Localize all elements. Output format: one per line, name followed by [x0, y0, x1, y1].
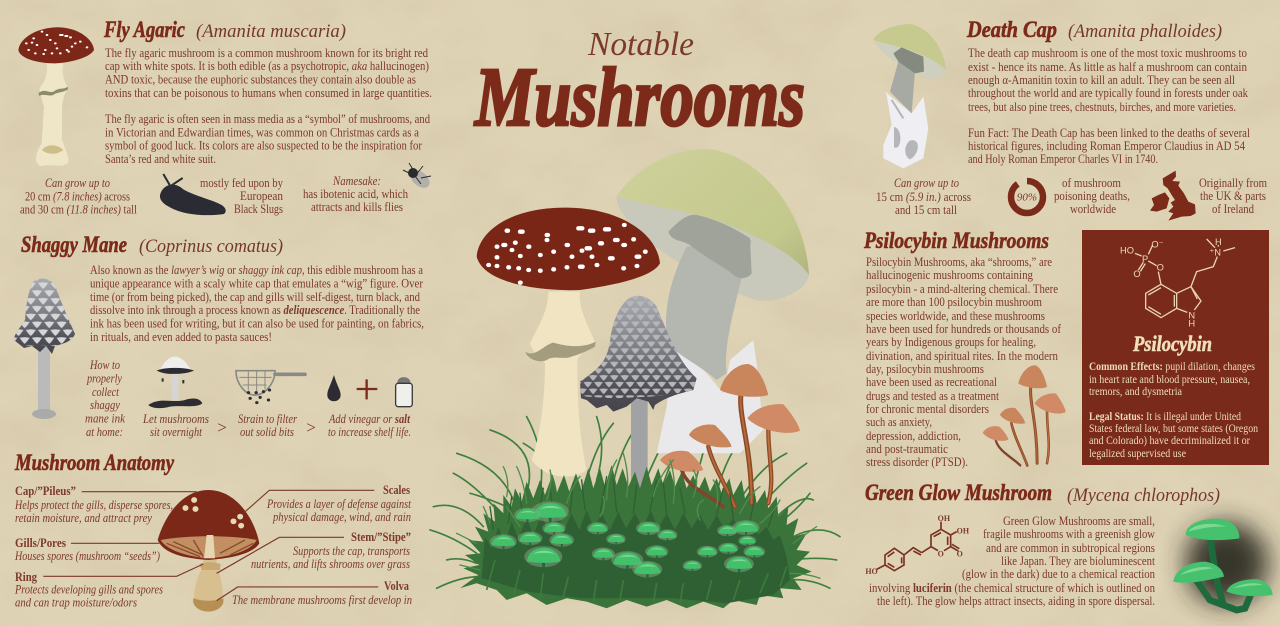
- heading: Psilocybin Mushrooms: [863, 228, 1049, 253]
- description: for chronic mental disorders: [866, 402, 989, 416]
- slug caption: European: [240, 189, 284, 203]
- panel: death cap: [873, 17, 1267, 221]
- label: gills: Gills/Pores: [15, 536, 66, 550]
- origin caption: the UK & parts: [1200, 189, 1266, 203]
- description: hallucinogenic mushrooms containing: [866, 268, 1034, 282]
- how to caption: [85, 358, 125, 439]
- heading: Green Glow Mushroom: [865, 480, 1052, 505]
- how to caption: at home:: [86, 425, 123, 439]
- fly agaric mushroom: [477, 208, 660, 477]
- description: [90, 263, 424, 344]
- title: Mushrooms: [473, 51, 805, 144]
- death cap mushroom: [617, 149, 809, 453]
- description: AND toxic, because the euphoric substances they contain also double as: [105, 72, 416, 86]
- size caption: [876, 176, 971, 217]
- icon: UK and Ireland map: [1150, 171, 1196, 221]
- icon: shaggy mane mushroom: [14, 278, 75, 419]
- size caption: and 15 cm tall: [895, 203, 957, 217]
- size caption: Can grow up to: [45, 176, 110, 190]
- front grass: [457, 453, 820, 603]
- chemical structure: psilocybin: H: [1188, 319, 1195, 329]
- legal status: legalized supervised use: [1089, 446, 1186, 460]
- common effects: in heart rate and blood pressure, nausea,: [1089, 372, 1250, 386]
- description: The death cap mushroom is one of the most toxic mushrooms to: [968, 46, 1247, 60]
- icon: fly: [403, 163, 433, 191]
- description: years by Indigenous groups for healing,: [866, 335, 1036, 349]
- label: cap: retain moisture, and attract prey: [15, 511, 152, 525]
- origin caption: [1199, 176, 1267, 216]
- heading: Mushroom Anatomy: [14, 450, 175, 475]
- common effects: Common Effects: pupil dilation, changes: [1089, 359, 1255, 373]
- label: ring: [14, 570, 163, 610]
- grass mid layer: [460, 465, 812, 608]
- icon: ink mushroom step: [148, 357, 202, 408]
- icon: strainer: [236, 371, 305, 403]
- label: ring: Ring: [15, 570, 38, 584]
- step caption: vinegar or salt: [328, 412, 411, 439]
- step caption: vinegar or salt: Add vinegar or salt: [328, 412, 410, 426]
- how to caption: mane ink: [85, 412, 125, 426]
- glowing green mushrooms: [490, 501, 765, 578]
- label: scales: Provides a layer of defense against: [266, 497, 411, 511]
- description: have been used as recreational: [866, 375, 997, 389]
- description: depression, addiction,: [866, 429, 961, 443]
- poisoning caption: of mushroom: [1062, 176, 1121, 190]
- label: cap: [14, 484, 173, 525]
- description: [869, 514, 1156, 608]
- panel: psilocybin mushrooms: [863, 228, 1269, 469]
- origin caption: Originally from: [1199, 176, 1267, 190]
- slug caption: Black Slugs: [234, 202, 283, 216]
- poisoning caption: worldwide: [1070, 202, 1116, 216]
- description: and are common in subtropical regions: [986, 541, 1155, 555]
- description: trees, but also pine trees, chestnuts, birches, and more varieties.: [968, 100, 1236, 114]
- size caption: 15 cm (5.9 in.) across: [876, 190, 971, 204]
- chemical structure: luciferin: OH: [957, 526, 970, 535]
- legal status: Legal Status: It is illegal under United: [1089, 409, 1241, 423]
- label: gills: [14, 536, 160, 563]
- step caption: vinegar or salt: to increase shelf life.: [328, 425, 411, 439]
- label: stem: [251, 530, 411, 571]
- description: Psilocybin Mushrooms, aka “shrooms,” are: [866, 255, 1052, 269]
- legal status: and Colorado) have decriminalized it or: [1089, 433, 1250, 447]
- namesake caption: has ibotenic acid, which: [303, 187, 409, 201]
- how to caption: collect: [92, 385, 119, 399]
- label: cap: Helps protect the gills, disperse spores,: [14, 498, 173, 512]
- label: stem: Stem/”Stipe”: [351, 530, 411, 544]
- donut chart: 90%: 90%: [1017, 192, 1037, 204]
- latin name: (Amanita muscaria): [196, 21, 346, 42]
- chemical structure: psilocybin: [1120, 237, 1235, 329]
- description: involving luciferin (the chemical structure of which is outlined on: [869, 581, 1156, 595]
- heading: Death Cap: [966, 17, 1057, 42]
- anatomy mushroom diagram: [43, 490, 378, 612]
- heading: Fly Agaric: [103, 17, 185, 42]
- label: ring: Protects developing gills and spores: [14, 582, 163, 596]
- chemical structure: luciferin: OH: [938, 514, 951, 523]
- label: ring: and can trap moisture/odors: [15, 596, 137, 610]
- label: scales: Scales: [383, 483, 410, 497]
- chemical structure: psilocybin: O: [1157, 262, 1164, 272]
- description: time (or from being picked), the cap and gills will self-digest, turn black, and: [90, 290, 421, 304]
- description: drugs and tested as a treatment: [866, 389, 999, 403]
- central illustration: mushrooms in grass: [430, 149, 840, 608]
- description: dissolve into ink through a process known as deliquescence. Traditionally the: [90, 303, 420, 317]
- back grass: [430, 405, 840, 588]
- description: historical figures, including Roman Emperor Claudius in AD 54: [968, 139, 1246, 153]
- description: in rituals, and even added to pasta sauces!: [90, 330, 272, 344]
- namesake caption: attracts and kills flies: [311, 200, 403, 214]
- description: ink has been used for writing, but it can also be used for painting, on fabrics,: [90, 316, 424, 330]
- step caption: strain: out solid bits: [240, 425, 294, 439]
- description: fragile mushrooms with a greenish glow: [983, 527, 1155, 541]
- description: in Victorian and Edwardian times, was common on Christmas cards as a: [105, 126, 419, 140]
- description: unique appearance with a scaly white cap that emulates a “wig” figure. Over: [90, 276, 424, 290]
- description: and post-traumatic: [866, 442, 948, 456]
- namesake caption: Namesake:: [332, 174, 381, 188]
- label: gills: Houses spores (mushroom “seeds”): [14, 549, 160, 563]
- description: like Japan. They are bioluminescent: [1001, 554, 1155, 568]
- slug caption: [200, 176, 284, 216]
- step caption: sit overnight: [142, 412, 209, 439]
- size caption: 20 cm (7.8 inches) across: [25, 190, 130, 204]
- common effects: [1089, 359, 1255, 398]
- latin name: (Amanita phalloides): [1068, 21, 1222, 42]
- namesake caption: [303, 174, 409, 214]
- description: symbol of good luck. Its colors are also suspected to be the inspiration for: [105, 138, 423, 152]
- donut chart: 90%: [1011, 181, 1043, 213]
- title: [473, 26, 805, 144]
- step caption: strain: Strain to filter: [238, 412, 297, 426]
- latin name: (Mycena chlorophos): [1067, 485, 1220, 506]
- size caption: Can grow up to: [894, 176, 959, 190]
- label: volva: [232, 579, 412, 607]
- label: stem: nutrients, and lifts shrooms over grass: [251, 557, 410, 571]
- description: and Holy Roman Emperor Charles VI in 1740.: [968, 152, 1158, 166]
- description: such as anxiety,: [866, 415, 932, 429]
- how to caption: shaggy: [90, 398, 120, 412]
- description: are more than 100 psilocybin mushroom: [866, 295, 1042, 309]
- description: The fly agaric is often seen in mass media as a “symbol” of mushrooms, and: [105, 112, 431, 126]
- description: have been used for hundreds or thousands of: [866, 322, 1062, 336]
- description: psilocybin - a mind-altering chemical. There: [866, 282, 1058, 296]
- poisoning caption: poisoning deaths,: [1054, 189, 1130, 203]
- size caption: and 30 cm (11.8 inches) tall: [20, 202, 137, 216]
- label: stem: Supports the cap, transports: [293, 544, 410, 558]
- icon: psilocybin mushrooms: [983, 365, 1066, 465]
- description: enough α-Amanitin toxin to kill an adult. They can be seen all: [968, 73, 1235, 87]
- panel: mushroom anatomy: [14, 450, 412, 612]
- icon: fly agaric mushroom: [18, 27, 94, 166]
- common effects: tremors, and dysmetria: [1089, 384, 1183, 398]
- panel: psilocybin molecule box: [1082, 230, 1269, 465]
- label: volva: Volva: [384, 579, 410, 593]
- arrow: >: [217, 418, 227, 437]
- description: Santa’s red and white suit.: [105, 152, 216, 166]
- step caption: sit overnight: Let mushrooms: [142, 412, 209, 426]
- icon: glowing mushrooms: [1173, 519, 1273, 610]
- slug caption: mostly fed upon by: [200, 176, 284, 190]
- description: [968, 46, 1250, 166]
- description: exist - hence its name. As little as half a mushroom can contain: [968, 60, 1248, 74]
- chemical structure: psilocybin: ⁺N: [1209, 247, 1221, 257]
- how to caption: properly: [86, 372, 122, 386]
- description: [866, 255, 1062, 469]
- description: stress disorder (PTSD).: [866, 455, 968, 469]
- description: species worldwide, and these mushrooms: [866, 309, 1045, 323]
- description: (glow in the dark) due to a chemical reaction: [962, 567, 1156, 581]
- size caption: [20, 176, 137, 216]
- panel: fly agaric: [18, 17, 433, 216]
- chemical structure: luciferin: O: [938, 550, 944, 559]
- label: scales: [266, 483, 411, 524]
- description: [105, 46, 432, 166]
- chemical structure: psilocybin: N: [1188, 310, 1195, 320]
- step caption: strain: [238, 412, 297, 439]
- shaggy ink cap mushroom: [580, 296, 697, 493]
- icon: vinegar drop, plus and salt shaker: [327, 375, 412, 407]
- poisoning caption: [1054, 176, 1130, 216]
- title: Notable: [587, 26, 694, 63]
- description: cap with white spots. It is both edible (as a psychotropic, aka hallucinogen): [105, 59, 429, 73]
- step caption: sit overnight: sit overnight: [150, 425, 202, 439]
- heading: Shaggy Mane: [21, 232, 127, 257]
- arrow: >: [306, 418, 316, 437]
- chemical structure: luciferin: [865, 514, 970, 576]
- chemical structure: psilocybin: P: [1142, 254, 1148, 264]
- tan mushrooms: [660, 364, 800, 507]
- label: scales: physical damage, wind, and rain: [272, 510, 411, 524]
- icon: black slug: [160, 174, 226, 215]
- how to caption: How to: [89, 358, 120, 372]
- panel: shaggy mane: [14, 232, 424, 439]
- description: toxins that can be poisonous to humans when consumed in large quantities.: [105, 86, 432, 100]
- label: volva: The membrane mushrooms first develop in: [232, 593, 412, 607]
- chemical structure: psilocybin: O: [1133, 269, 1141, 279]
- chemical structure: psilocybin: H: [1215, 237, 1222, 247]
- box heading: Psilocybin: [1132, 331, 1212, 356]
- chemical structure: luciferin: HO: [865, 567, 878, 576]
- chemical structure: luciferin: O: [957, 550, 963, 559]
- origin caption: of Ireland: [1212, 202, 1255, 216]
- chemical structure: psilocybin: HO: [1120, 246, 1134, 256]
- description: Green Glow Mushrooms are small,: [1003, 514, 1155, 528]
- panel: green glow mushroom: [865, 480, 1273, 610]
- legal status: [1089, 409, 1258, 460]
- label: cap: Cap/”Pileus”: [15, 484, 76, 498]
- description: day, psilocybin mushrooms: [866, 362, 984, 376]
- description: Also known as the lawyer’s wig or shaggy ink cap, this edible mushroom has a: [90, 263, 423, 277]
- description: The fly agaric mushroom is a common mushroom known for its bright red: [105, 46, 429, 60]
- description: divination, and spiritual rites. In the modern: [866, 349, 1059, 363]
- chemical structure: psilocybin: O⁻: [1151, 240, 1164, 250]
- description: the left). The glow helps attract insects, aiding in spore dispersal.: [877, 594, 1155, 608]
- icon: death cap mushroom: [873, 24, 946, 168]
- latin name: (Coprinus comatus): [139, 236, 283, 257]
